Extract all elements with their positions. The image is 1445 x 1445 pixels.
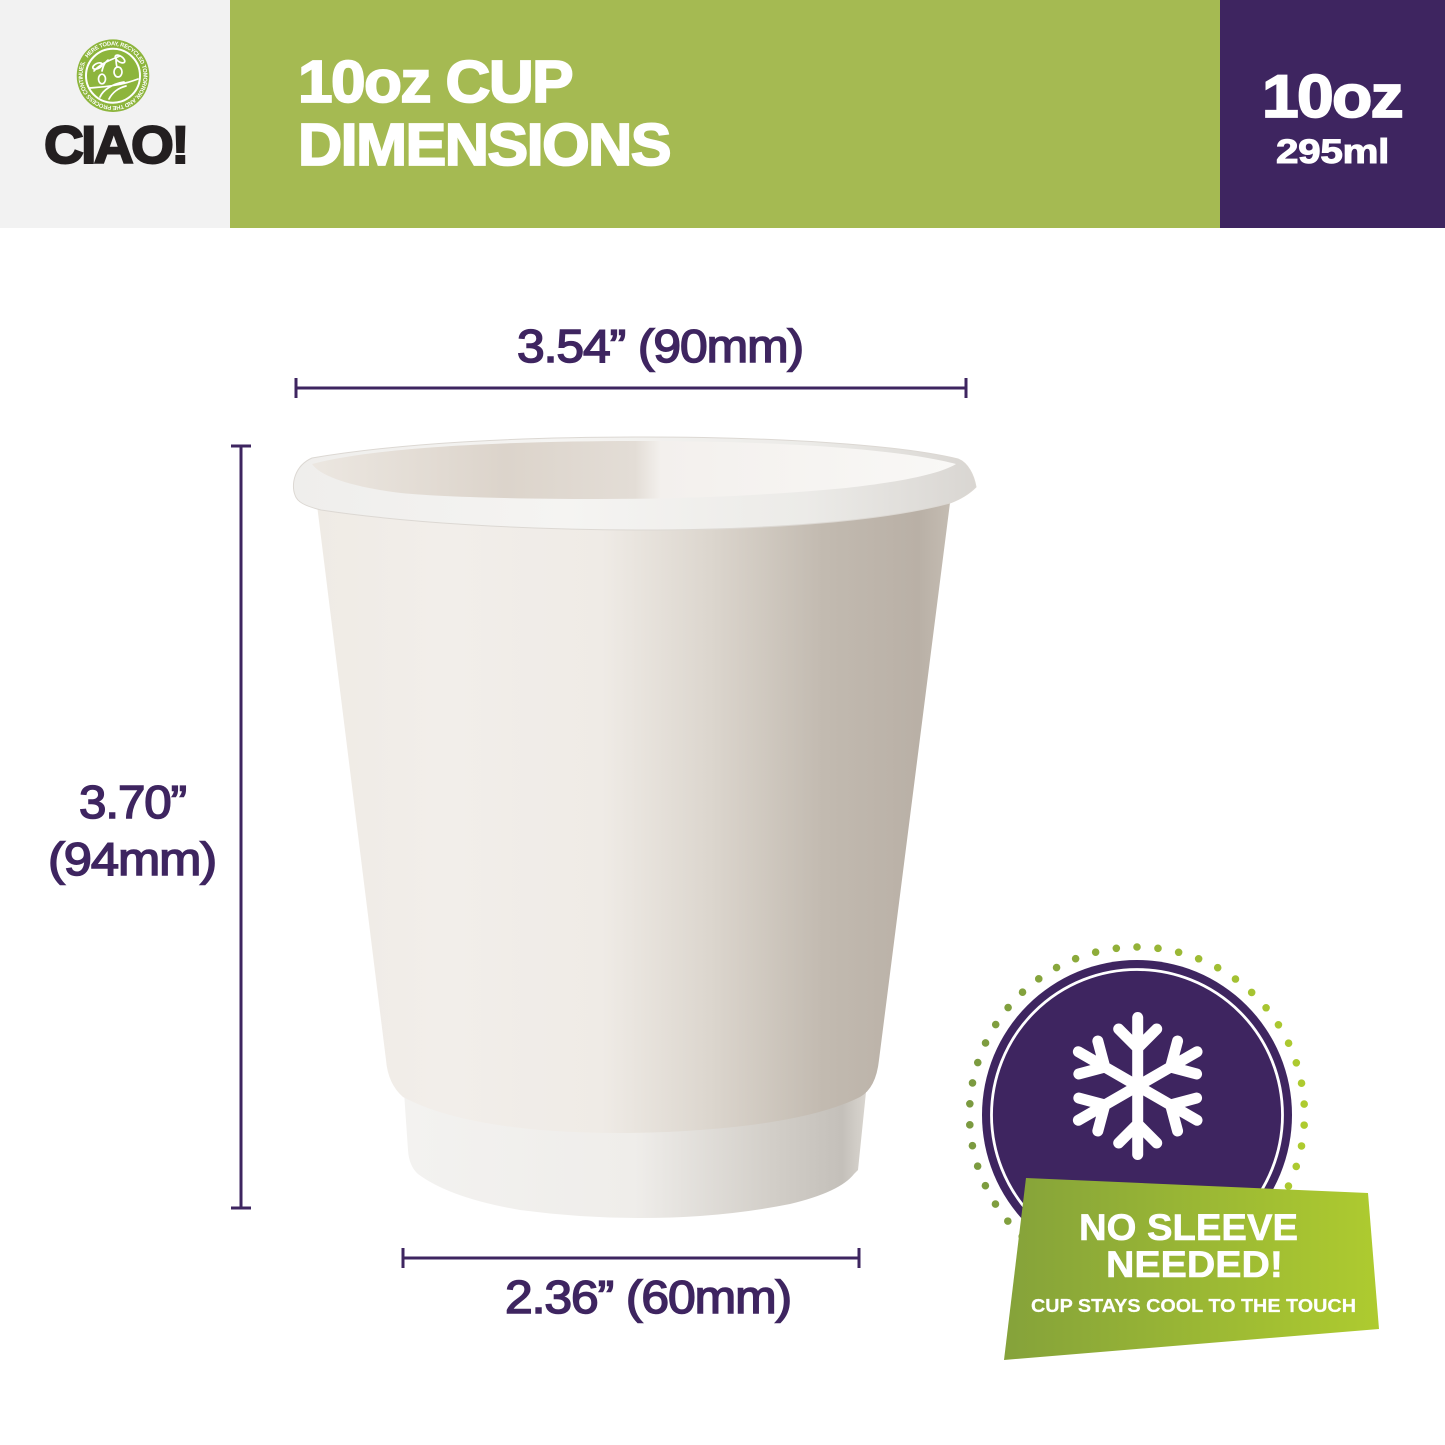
cup interior <box>312 441 956 499</box>
purple circle <box>982 960 1292 1270</box>
cup body <box>317 495 951 1133</box>
logo panel <box>0 0 230 228</box>
capacity panel: 10oz <box>1262 63 1402 130</box>
title text <box>298 49 670 178</box>
cup base band <box>404 1092 866 1218</box>
dotted ring <box>969 947 1304 1282</box>
title text: 10oz CUP <box>298 49 572 115</box>
header bar <box>0 0 1445 228</box>
top width dimension <box>296 320 966 398</box>
height dimension <box>48 446 251 1208</box>
green banner: CUP STAYS COOL TO THE TOUCH <box>1031 1296 1356 1316</box>
logo badge: HERE TODAY, RECYCLED TOMORROW, AND THE PROCESS CONTINUES. <box>78 41 148 110</box>
logo wordmark: CIAO! <box>44 116 187 175</box>
capacity panel <box>1220 0 1445 228</box>
title text: DIMENSIONS <box>298 112 670 178</box>
cup rim <box>293 437 976 530</box>
title panel <box>230 0 1220 228</box>
bottom width dimension: 2.36” (60mm) <box>505 1271 791 1323</box>
icon: snowflake <box>1069 1018 1207 1154</box>
green banner: NO SLEEVE <box>1079 1207 1298 1248</box>
capacity panel: 295ml <box>1276 133 1389 171</box>
green banner: NEEDED! <box>1106 1244 1283 1285</box>
bottom width dimension <box>403 1248 859 1323</box>
height dimension: (94mm) <box>48 833 216 885</box>
height dimension: 3.70” <box>79 776 186 828</box>
paper cup <box>293 437 976 1218</box>
no sleeve badge <box>969 947 1379 1360</box>
green banner <box>1004 1178 1379 1360</box>
top width dimension: 3.54” (90mm) <box>517 320 803 372</box>
